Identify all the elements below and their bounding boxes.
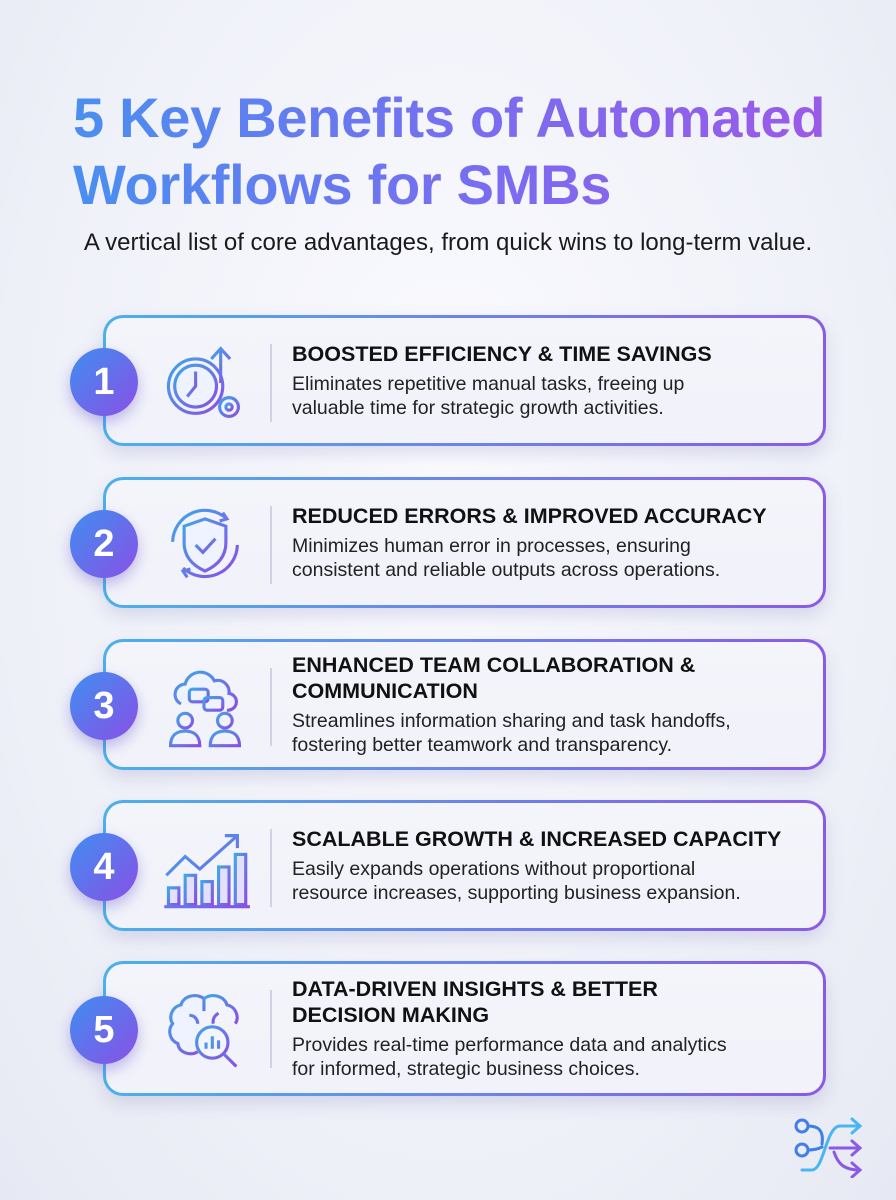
icon: clock with arrow and gear <box>166 346 240 418</box>
icon: shield check <box>171 508 239 578</box>
text: ENHANCED TEAM COLLABORATION & <box>292 653 695 677</box>
title: 5 Key Benefits of Automated <box>73 86 825 149</box>
number 2: 2 <box>93 523 115 565</box>
subtitle: A vertical list of core advantages, from quick wins to long-term value. <box>84 229 812 256</box>
text: Streamlines information sharing and task handoffs, fostering better teamwork and transparency. <box>292 710 731 756</box>
panel: card 1 <box>103 315 826 446</box>
number 5: 5 <box>93 1009 115 1051</box>
panel: card 4 <box>103 800 826 931</box>
panel: card 2 <box>103 477 826 608</box>
number 5 <box>70 996 138 1064</box>
number 4: 4 <box>93 846 115 888</box>
text: Eliminates repetitive manual tasks, freeing up valuable time for strategic growth activities. <box>292 373 684 419</box>
icon: growth bar chart <box>164 834 250 908</box>
text <box>292 504 767 581</box>
text: DATA-DRIVEN INSIGHTS & BETTER <box>292 977 658 1001</box>
text: Provides real-time performance data and analytics for informed, strategic business choices. <box>292 1034 727 1080</box>
number 1: 1 <box>93 361 115 403</box>
number 3 <box>70 672 138 740</box>
title <box>73 86 825 216</box>
text: REDUCED ERRORS & IMPROVED ACCURACY <box>292 504 767 528</box>
text: DECISION MAKING <box>292 1003 489 1027</box>
text: BOOSTED EFFICIENCY & TIME SAVINGS <box>292 342 712 366</box>
panel: card 5 <box>103 961 826 1096</box>
text <box>292 653 731 756</box>
title: Workflows for SMBs <box>73 153 611 216</box>
text: Minimizes human error in processes, ensuring consistent and reliable outputs across operations. <box>292 535 720 581</box>
text: SCALABLE GROWTH & INCREASED CAPACITY <box>292 827 781 851</box>
text <box>292 827 781 904</box>
number 1 <box>70 348 138 416</box>
icon: brain with magnifier <box>168 994 239 1068</box>
number 2 <box>70 510 138 578</box>
text: Easily expands operations without proportional resource increases, supporting business expansion. <box>292 858 741 904</box>
text: COMMUNICATION <box>292 679 478 703</box>
icon: workflow logo <box>794 1117 862 1178</box>
number 4 <box>70 833 138 901</box>
panel: card 3 <box>103 639 826 770</box>
number 3: 3 <box>93 685 115 727</box>
icon: cloud and people <box>168 670 242 748</box>
text <box>292 977 727 1080</box>
text <box>292 342 712 419</box>
